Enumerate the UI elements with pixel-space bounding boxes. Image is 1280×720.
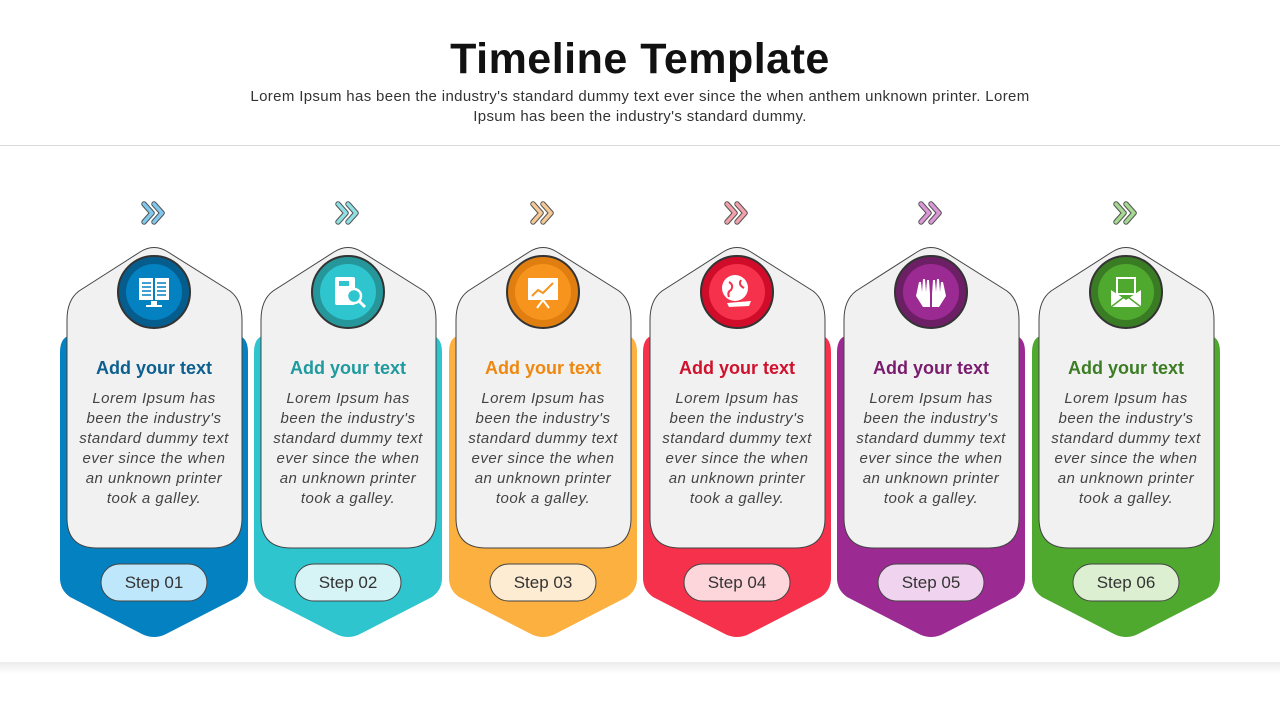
body text: standard dummy text <box>273 430 423 447</box>
body text: took a galley. <box>496 490 590 507</box>
step pill <box>684 564 790 601</box>
subtitle <box>250 88 1030 125</box>
icon: globe with cap <box>701 256 773 328</box>
body text: an unknown printer <box>669 470 806 487</box>
icon: envelope <box>1090 256 1162 328</box>
body text <box>1051 390 1201 507</box>
body text: Lorem Ipsum has <box>286 390 410 407</box>
body text: ever since the when <box>666 450 808 467</box>
body text: standard dummy text <box>79 430 229 447</box>
heading: Add your text <box>290 358 406 378</box>
body text: took a galley. <box>107 490 201 507</box>
step 1 card <box>60 204 248 637</box>
step 4 card <box>643 204 831 637</box>
body text: Lorem Ipsum has <box>481 390 605 407</box>
body text: been the industry's <box>1059 410 1193 427</box>
body text: an unknown printer <box>86 470 223 487</box>
body text: ever since the when <box>277 450 419 467</box>
body text: been the industry's <box>281 410 415 427</box>
chevron <box>727 204 745 222</box>
body text: an unknown printer <box>475 470 612 487</box>
step pill: Step 04 <box>708 573 766 592</box>
body text: took a galley. <box>1079 490 1173 507</box>
body text: ever since the when <box>83 450 225 467</box>
body text: Lorem Ipsum has <box>675 390 799 407</box>
chevron <box>921 204 939 222</box>
chevron <box>338 204 356 222</box>
body text: standard dummy text <box>1051 430 1201 447</box>
step pill <box>101 564 207 601</box>
body text: standard dummy text <box>468 430 618 447</box>
title: Timeline Template <box>450 35 830 83</box>
subtitle: Lorem Ipsum has been the industry's standard dummy text ever since the when anthem unknown printer. Lorem <box>250 88 1030 105</box>
step pill: Step 02 <box>319 573 377 592</box>
body text: been the industry's <box>864 410 998 427</box>
body text: an unknown printer <box>1058 470 1195 487</box>
body text <box>79 390 229 507</box>
header background line <box>0 145 1280 146</box>
step pill: Step 01 <box>125 573 183 592</box>
body text: been the industry's <box>670 410 804 427</box>
body text: an unknown printer <box>280 470 417 487</box>
step pill: Step 03 <box>514 573 572 592</box>
body text: Lorem Ipsum has <box>869 390 993 407</box>
body text: an unknown printer <box>863 470 1000 487</box>
heading: Add your text <box>96 358 212 378</box>
icon: book monitor <box>118 256 190 328</box>
heading: Add your text <box>873 358 989 378</box>
step 6 card <box>1032 204 1220 637</box>
step pill <box>490 564 596 601</box>
step 2 card <box>254 204 442 637</box>
chevron <box>1116 204 1134 222</box>
subtitle: Ipsum has been the industry's standard dummy. <box>473 108 807 125</box>
step 3 card <box>449 204 637 637</box>
body text: been the industry's <box>87 410 221 427</box>
body text: standard dummy text <box>856 430 1006 447</box>
body text: ever since the when <box>860 450 1002 467</box>
body text: been the industry's <box>476 410 610 427</box>
chevron <box>144 204 162 222</box>
icon: high five hands <box>895 256 967 328</box>
body text <box>273 390 423 507</box>
body text <box>662 390 812 507</box>
body text: took a galley. <box>690 490 784 507</box>
heading: Add your text <box>1068 358 1184 378</box>
body text: ever since the when <box>472 450 614 467</box>
icon: document search <box>312 256 384 328</box>
body text: took a galley. <box>884 490 978 507</box>
body text: standard dummy text <box>662 430 812 447</box>
heading: Add your text <box>485 358 601 378</box>
step pill: Step 06 <box>1097 573 1155 592</box>
step pill <box>878 564 984 601</box>
body text <box>468 390 618 507</box>
body text: ever since the when <box>1055 450 1197 467</box>
step 5 card <box>837 204 1025 637</box>
body text: took a galley. <box>301 490 395 507</box>
heading: Add your text <box>679 358 795 378</box>
chevron <box>533 204 551 222</box>
step pill <box>295 564 401 601</box>
icon: presentation chart <box>507 256 579 328</box>
body text <box>856 390 1006 507</box>
step pill: Step 05 <box>902 573 960 592</box>
body text: Lorem Ipsum has <box>92 390 216 407</box>
step pill <box>1073 564 1179 601</box>
body text: Lorem Ipsum has <box>1064 390 1188 407</box>
